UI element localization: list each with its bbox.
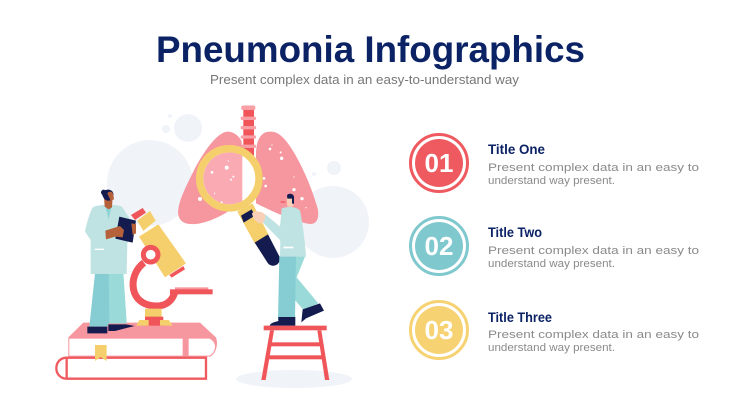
hands — [105, 226, 124, 239]
near leg — [278, 256, 296, 320]
clipboard — [115, 217, 136, 243]
badge 3: 03 — [425, 315, 453, 345]
body 3: Present complex data in an easy to — [488, 329, 699, 341]
shoes — [87, 327, 107, 333]
heading 3: Title Three — [488, 310, 552, 325]
neck and head — [104, 197, 113, 209]
stool — [261, 326, 329, 380]
trousers — [89, 273, 127, 327]
left lung — [178, 132, 242, 224]
top book — [68, 323, 217, 357]
badge 2 — [410, 218, 468, 274]
title: Pneumonia Infographics — [156, 29, 585, 70]
body 1: understand way present. — [488, 175, 615, 187]
body 3: understand way present. — [488, 342, 615, 354]
shoe front — [270, 317, 295, 326]
bookmark — [95, 345, 107, 361]
badge 2: 02 — [425, 231, 453, 261]
shoe back — [301, 303, 324, 322]
man on stool — [252, 194, 329, 380]
item 1 — [410, 134, 699, 192]
badge 1: 01 — [425, 148, 453, 178]
magnifier lens — [203, 152, 256, 205]
books, microscope and scientist — [56, 190, 217, 379]
magnifier handle — [237, 203, 280, 266]
item 2 — [410, 218, 699, 274]
badge 1 — [410, 134, 468, 192]
trachea — [241, 106, 256, 164]
lung spots — [198, 144, 307, 208]
subtitle: Present complex data in an easy-to-understand way — [210, 72, 520, 87]
microscope — [131, 208, 213, 326]
far leg — [283, 255, 318, 311]
badge 3 — [410, 302, 468, 358]
heading 1: Title One — [488, 142, 545, 157]
bottom book — [56, 358, 206, 379]
magnifier ring — [200, 149, 259, 208]
body 2: Present complex data in an easy to — [488, 245, 699, 257]
body 1: Present complex data in an easy to — [488, 162, 699, 174]
coat — [85, 205, 136, 274]
right lung — [256, 132, 318, 224]
background blobs — [107, 114, 369, 388]
head — [281, 194, 294, 207]
illustration: lungs and magnifier — [178, 106, 318, 266]
hand — [252, 211, 265, 223]
arm and coat — [262, 207, 306, 257]
scientist — [85, 190, 136, 333]
heading 2: Title Two — [488, 225, 542, 240]
item 3 — [410, 302, 699, 358]
body 2: understand way present. — [488, 258, 615, 270]
